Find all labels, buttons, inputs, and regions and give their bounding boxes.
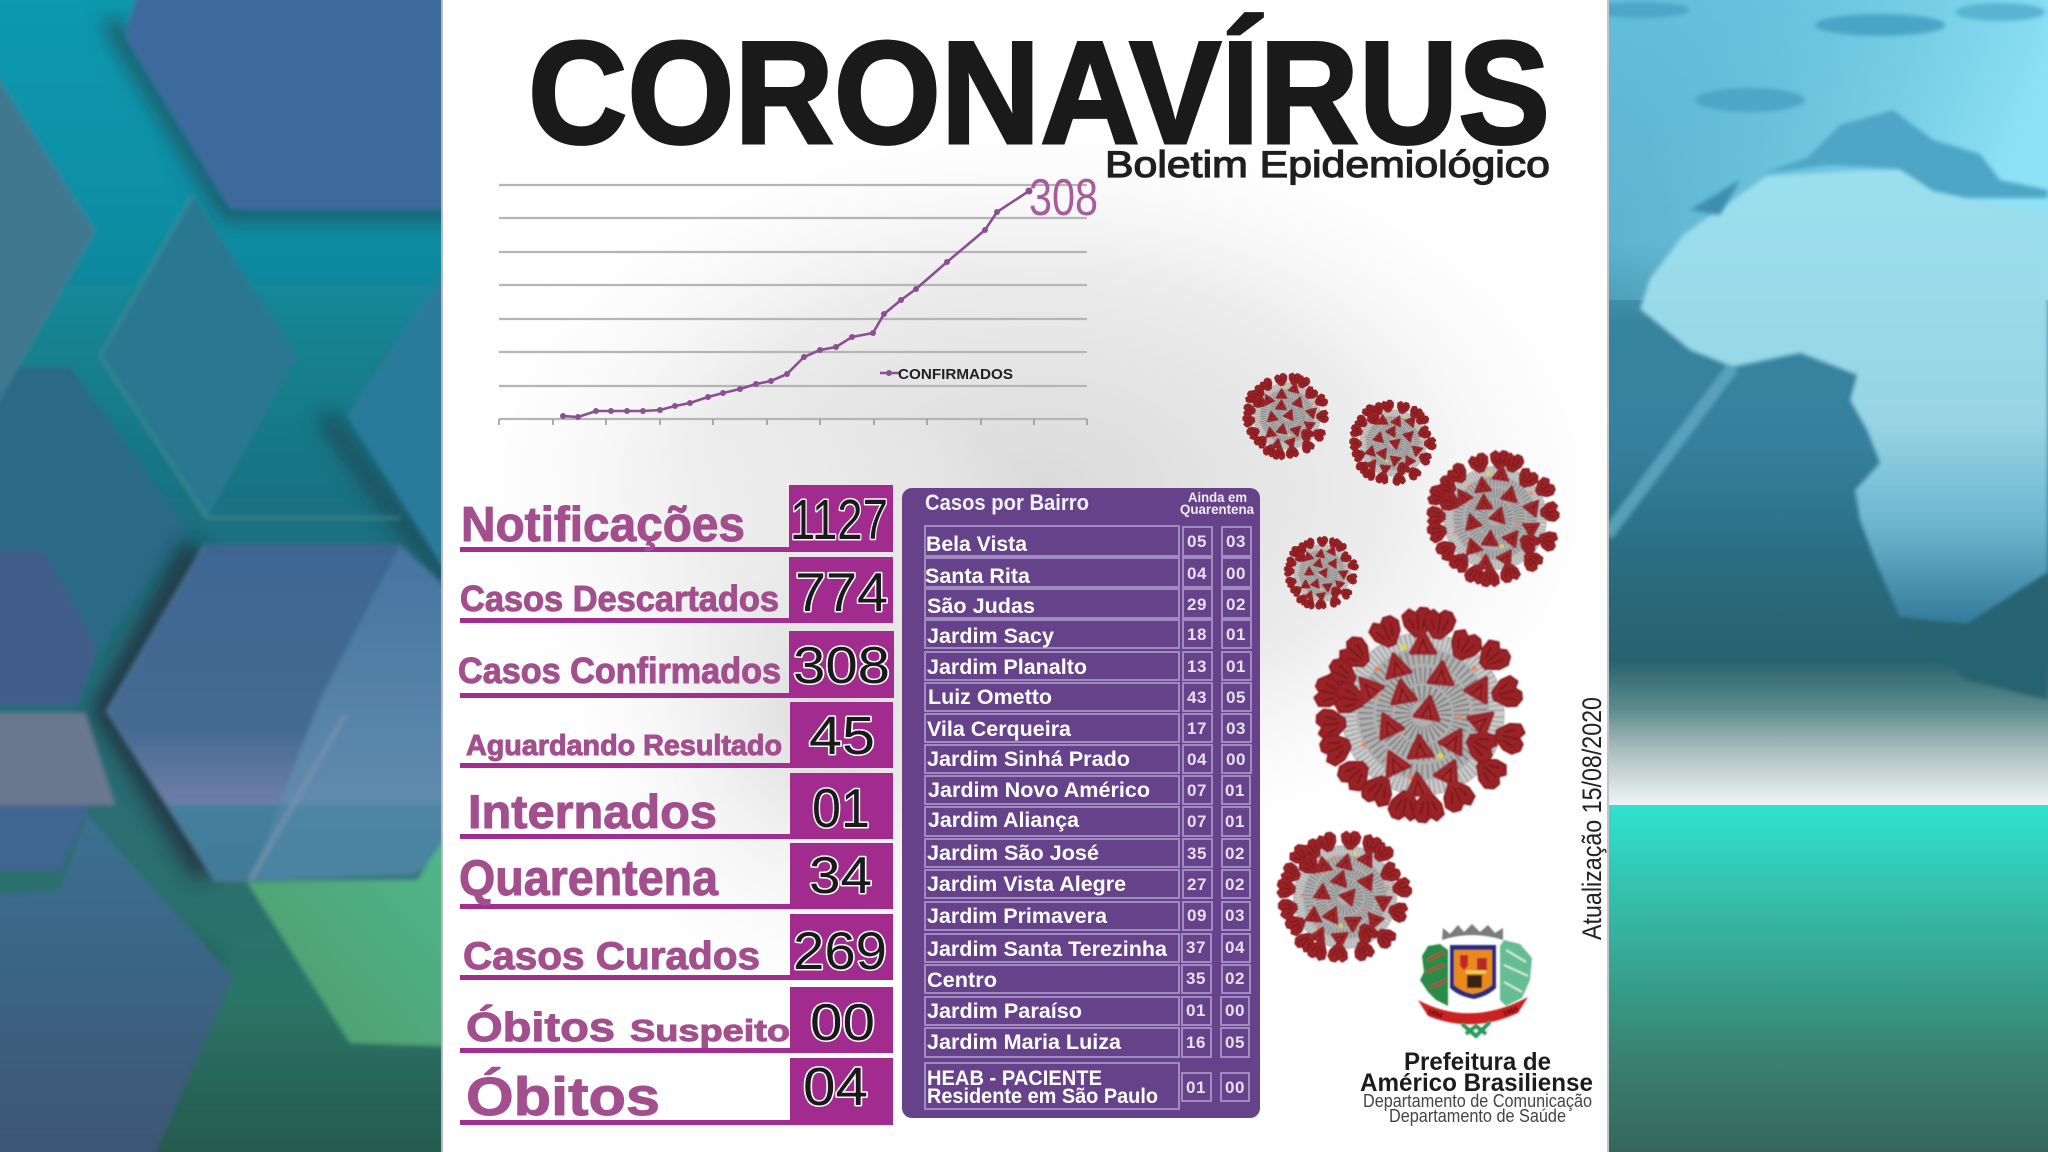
line chart: confirmed cases [499, 169, 1098, 425]
row: Jardim Maria Luiza: 05 [1225, 1033, 1245, 1052]
row: Jardim Sacy: 18 [1187, 625, 1207, 644]
row: Jardim Paraíso: 00 [1225, 1001, 1245, 1020]
row: Luiz Ometto [925, 683, 1251, 711]
row: Jardim Planalto [925, 652, 1251, 680]
row: Jardim Novo Américo: Jardim Novo Américo [928, 779, 1150, 802]
row: Vila Cerqueira: 17 [1187, 719, 1207, 738]
row: Jardim Planalto: 01 [1226, 657, 1246, 676]
row: Jardim Santa Terezinha: 37 [1186, 938, 1206, 957]
row: Jardim Primavera: Jardim Primavera [927, 905, 1107, 928]
stat row: Internados: Internados [468, 785, 717, 838]
row: Jardim Aliança [925, 807, 1250, 836]
row: Jardim Sinhá Prado [925, 745, 1251, 773]
row: HEAB patient [925, 1063, 1249, 1109]
row: Jardim Sacy: Jardim Sacy [927, 625, 1054, 648]
row: Jardim Santa Terezinha: 04 [1225, 938, 1245, 957]
row: HEAB patient: HEAB - PACIENTE [927, 1067, 1102, 1090]
icon: municipal coat of arms: 1965 [1502, 1006, 1519, 1018]
row: Bela Vista: 05 [1187, 532, 1207, 551]
stat row: Aguardando Resultado: 45 [809, 706, 875, 766]
row: Centro: 35 [1186, 969, 1206, 988]
row: Luiz Ometto: 43 [1187, 688, 1207, 707]
table heading: Casos por Bairro [925, 490, 1089, 515]
row: Centro: 02 [1225, 969, 1245, 988]
row: Vila Cerqueira: Vila Cerqueira [927, 718, 1071, 741]
stat row: Casos Confirmados: 308 [793, 637, 890, 695]
row: HEAB patient: 00 [1225, 1078, 1245, 1097]
row: Jardim São José: 35 [1187, 844, 1207, 863]
stat row: Casos Curados: 269 [793, 922, 887, 981]
stat row: Internados: 01 [812, 777, 870, 839]
organisation name: Prefeitura de [1404, 1048, 1551, 1076]
row: Jardim Novo Américo: 01 [1225, 781, 1245, 800]
row: Jardim Sacy [925, 620, 1251, 648]
row: HEAB patient: 01 [1186, 1078, 1206, 1097]
stat row: Casos Curados: Casos Curados [463, 935, 760, 978]
stat row: Notificações: Notificações [461, 498, 745, 552]
row: São Judas: 29 [1187, 595, 1207, 614]
icons: coronavirus illustrations [1231, 362, 1570, 990]
row: São Judas: 02 [1226, 595, 1246, 614]
line chart: confirmed cases: 308 [1029, 169, 1098, 227]
row: Jardim Maria Luiza: Jardim Maria Luiza [927, 1031, 1121, 1054]
subtitle: Boletim Epidemiológico [1105, 144, 1550, 185]
row: São Judas [925, 589, 1251, 618]
stat row: Óbitos Suspeito: Óbitos [466, 1004, 615, 1050]
stat row: Notificações: 1127 [790, 488, 888, 552]
stat row: Óbitos: 04 [803, 1057, 868, 1117]
stat row: Quarentena: Quarentena [459, 850, 719, 906]
row: São Judas: São Judas [927, 595, 1035, 618]
row: Jardim Sinhá Prado: 04 [1187, 750, 1207, 769]
row: Bela Vista: Bela Vista [926, 533, 1027, 556]
row: Jardim Primavera [925, 902, 1250, 930]
stat row: Internados [460, 773, 893, 839]
stat row: Casos Curados [460, 914, 893, 981]
stat row: Casos Descartados: Casos Descartados [460, 578, 779, 619]
row: Jardim Novo Américo: 07 [1187, 781, 1207, 800]
row: Jardim Paraíso: Jardim Paraíso [927, 1000, 1082, 1023]
organisation name [1360, 1048, 1593, 1126]
stat row: Casos Descartados [460, 557, 893, 623]
row: Jardim São José: Jardim São José [927, 842, 1099, 865]
row: Jardim Primavera: 03 [1225, 906, 1245, 925]
row: Vila Cerqueira [925, 714, 1251, 742]
column heading: still in quarantine [1180, 490, 1254, 517]
row: Jardim São José: 02 [1225, 844, 1245, 863]
row: Jardim Vista Alegre: Jardim Vista Alegre [927, 873, 1126, 896]
stat row: Casos Confirmados: Casos Confirmados [458, 650, 781, 691]
title: CORONAVÍRUS [528, 11, 1550, 174]
row: Centro [925, 965, 1250, 993]
row: Jardim Planalto: Jardim Planalto [927, 656, 1087, 679]
row: Jardim Santa Terezinha [925, 934, 1250, 962]
row: Jardim Sinhá Prado: 00 [1226, 750, 1246, 769]
stat row: Óbitos: Óbitos [466, 1067, 660, 1127]
row: Luiz Ometto: 05 [1226, 688, 1246, 707]
row: Jardim Aliança: Jardim Aliança [928, 809, 1079, 832]
row: Jardim Paraíso [925, 997, 1249, 1025]
column heading: still in quarantine: Ainda em [1188, 490, 1247, 505]
row: Centro: Centro [927, 969, 997, 992]
row: Jardim Primavera: 09 [1187, 906, 1207, 925]
stat row: Casos Confirmados [458, 631, 894, 698]
stat row: Óbitos Suspeito: 00 [810, 994, 875, 1052]
background: left hexagon pattern [0, 0, 470, 1152]
icon: municipal coat of arms: 1894 [1426, 1008, 1443, 1020]
row: Jardim Maria Luiza: 16 [1186, 1033, 1206, 1052]
row: Bela Vista [925, 526, 1251, 556]
row: Santa Rita: 00 [1226, 564, 1246, 583]
panel: cases by neighbourhood [902, 488, 1260, 1118]
row: Jardim Maria Luiza [925, 1028, 1249, 1057]
row: Jardim Sinhá Prado: Jardim Sinhá Prado [927, 748, 1130, 771]
row: Jardim Vista Alegre [925, 870, 1250, 898]
line chart: confirmed cases: CONFIRMADOS [898, 366, 1013, 383]
update date, rotated: Atualização 15/08/2020 [1577, 697, 1607, 940]
stat row: Casos Descartados: 774 [795, 561, 888, 623]
row: Jardim Planalto: 13 [1187, 657, 1207, 676]
row: Jardim Paraíso: 01 [1186, 1001, 1206, 1020]
stat row: Óbitos [460, 1057, 893, 1127]
row: Santa Rita: Santa Rita [925, 565, 1030, 588]
row: Jardim Aliança: 01 [1225, 812, 1245, 831]
stat row: Notificações [460, 485, 893, 552]
icon: municipal coat of arms [1418, 924, 1532, 1036]
stat row: Aguardando Resultado: Aguardando Resultado [466, 730, 782, 762]
row: Jardim Santa Terezinha: Jardim Santa Terezinha [927, 938, 1167, 961]
row: Jardim Vista Alegre: 27 [1187, 875, 1207, 894]
stat row: Quarentena: 34 [809, 847, 872, 905]
row: Vila Cerqueira: 03 [1226, 719, 1246, 738]
row: Jardim Sacy: 01 [1226, 625, 1246, 644]
row: Bela Vista: 03 [1226, 532, 1246, 551]
stat row: Aguardando Resultado [460, 702, 893, 768]
row: Jardim São José [925, 839, 1250, 867]
stat row: Quarentena [459, 843, 893, 909]
background: right globe and teal band [1590, 0, 2048, 1152]
organisation name: Américo Brasiliense [1360, 1069, 1593, 1097]
column heading: still in quarantine: Quarentena [1180, 502, 1254, 517]
stat row: Óbitos Suspeito [460, 987, 893, 1053]
row: Santa Rita [925, 558, 1251, 588]
row: Jardim Aliança: 07 [1187, 812, 1207, 831]
row: Jardim Novo Américo [925, 776, 1250, 804]
organisation name: Departamento de Comunicação [1363, 1091, 1592, 1111]
row: Santa Rita: 04 [1187, 564, 1207, 583]
panel: central bulletin sheet [441, 0, 1609, 1152]
stat row: Óbitos Suspeito: Suspeito [630, 1013, 790, 1048]
organisation name: Departamento de Saúde [1389, 1106, 1566, 1126]
row: HEAB patient: Residente em São Paulo [927, 1085, 1158, 1108]
row: Luiz Ometto: Luiz Ometto [928, 686, 1052, 709]
row: Jardim Vista Alegre: 02 [1225, 875, 1245, 894]
